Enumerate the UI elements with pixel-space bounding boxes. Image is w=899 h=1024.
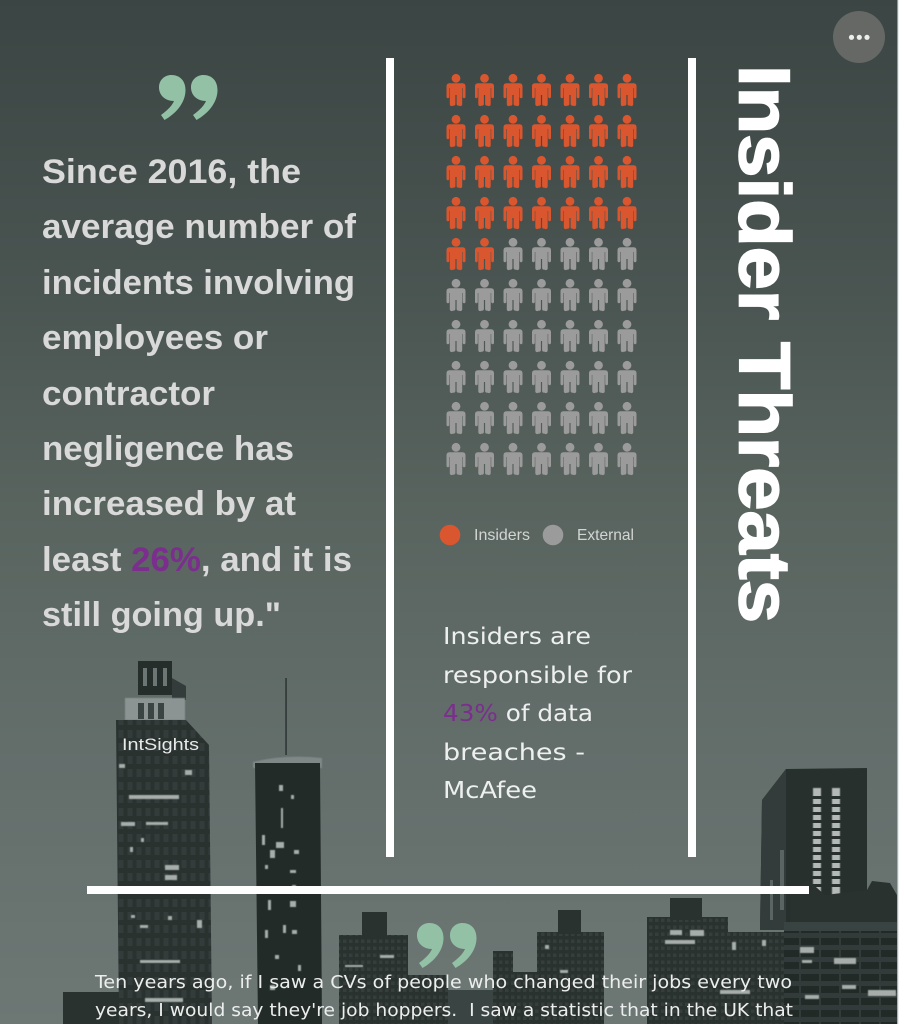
quote text block: Since 2016, the [42,153,301,191]
row 8 [446,361,636,393]
icon: bottom quotation mark [417,923,476,968]
quote text block: average number of [42,208,357,246]
building: second tower with antenna [253,678,322,1024]
city skyline photo [63,661,897,1024]
row 7 [446,320,636,352]
legend: external: External [577,527,634,544]
statistic text block: breaches - [443,738,585,766]
row 10 [446,443,636,475]
divider: horizontal bar [87,886,809,894]
quote text block: incidents involving [42,264,355,302]
row 9 [446,402,636,434]
bottom quote text [94,972,793,1021]
bottom quote text: years, I would say they're job hoppers. I saw a statistic that in the UK that [95,1000,793,1021]
row 4 [446,197,636,229]
legend: insiders: Insiders [474,527,530,544]
icon: more options button [833,11,885,63]
quote text block: negligence has [42,430,294,468]
building window lights [345,930,896,999]
statistic text block: responsible for [443,661,632,689]
statistic text block [443,622,632,804]
bottom quote text: Ten years ago, if I saw a CVs of people who changed their jobs every two [94,972,792,993]
building: tall tower left [116,661,212,1024]
icon: top quotation mark [159,75,218,120]
chart legend [440,525,634,545]
quote text block: employees or [42,319,268,357]
quote text block: contractor [42,375,215,413]
right edge strip [898,0,899,1024]
row 1 [446,74,636,106]
row 3 [446,156,636,188]
statistic text block: McAfee [443,776,537,804]
quote text block [42,153,357,634]
quote text block: increased by at [42,485,296,523]
quote text block: least 26%, and it is [42,541,352,579]
building: right high-rise [760,768,867,930]
row 6 [446,279,636,311]
legend: insiders [440,525,530,545]
pictogram chart: 70 people, 30 insiders [446,74,636,475]
statistic text block: 43% of data [443,699,593,727]
quote text block: still going up." [42,596,281,634]
statistic text block: Insiders are [443,622,591,650]
divider: left vertical bar [386,58,394,857]
quote source: IntSights [122,735,199,754]
divider: right vertical bar [688,58,696,857]
row 2 [446,115,636,147]
buildings: low-rise block row [63,880,897,1024]
row 5 [446,238,636,270]
title, rotated: Insider Threats [724,65,804,623]
legend: external [543,525,634,545]
